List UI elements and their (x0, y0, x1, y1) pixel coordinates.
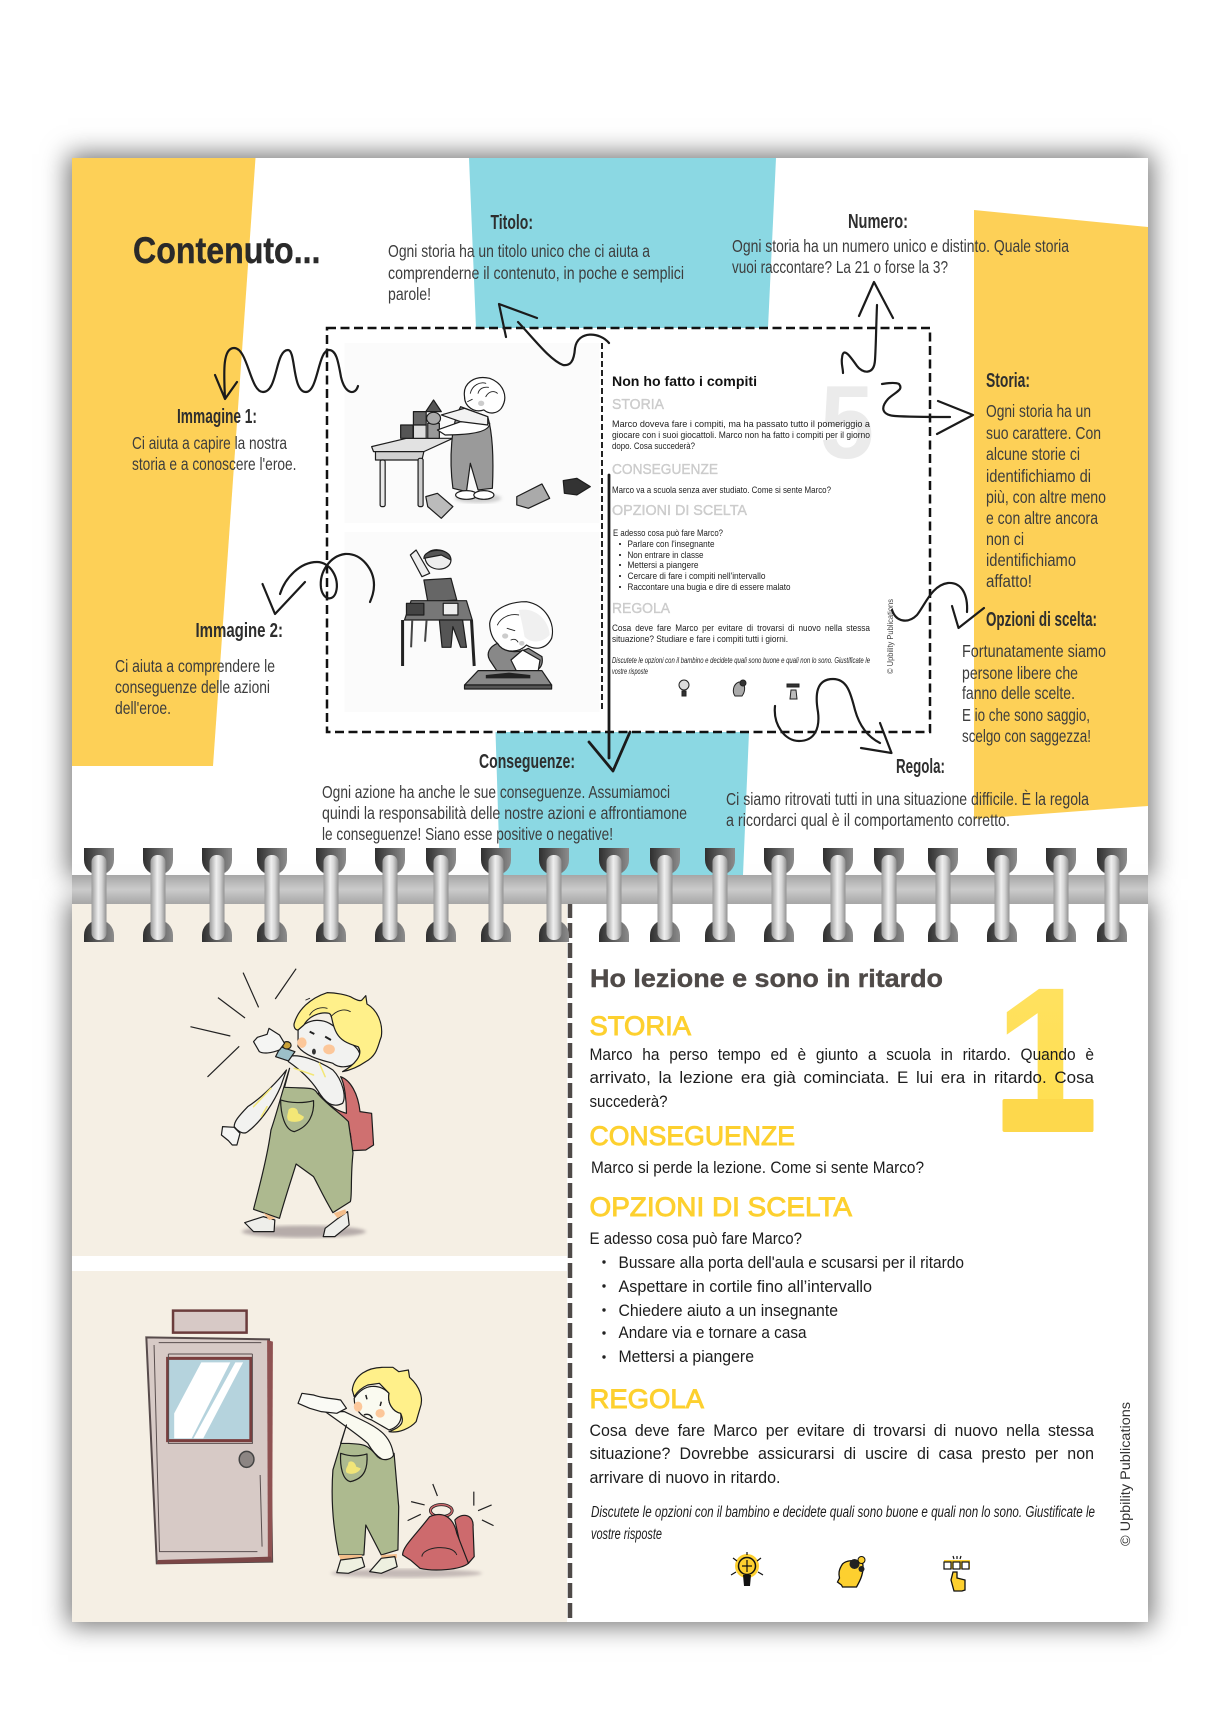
icon: light bulb (731, 1552, 763, 1586)
arrow: to Opzioni di scelta (892, 583, 984, 628)
mini options list: Raccontare una bugia e dire di essere malato (628, 582, 790, 593)
icon: head with gears (838, 1556, 865, 1587)
label: Storia: identifichiamo di (986, 466, 1091, 486)
label: Storia: Storia: (986, 370, 1030, 392)
mini heading: conseguenze: CONSEGUENZE (612, 461, 718, 478)
bottom page sheet (72, 904, 1148, 1622)
section: Regola (590, 1384, 1095, 1487)
mini page text (612, 365, 895, 699)
section: Opzioni di scelta: Mettersi a piangere (618, 1347, 754, 1366)
label: Opzioni di scelta: E io che sono saggio, (962, 705, 1090, 725)
mini options list: E adesso cosa può fare Marco? (613, 528, 723, 539)
section: Regola: Cosa deve fare Marco per evitare di trovarsi di nuovo nella stessa (590, 1421, 1095, 1440)
spiral binding band (72, 875, 1148, 904)
mini options list (613, 528, 790, 593)
label: Storia: non ci (986, 529, 1024, 549)
label: Numero: Ogni storia ha un numero unico e distinto. Quale storia (732, 236, 1069, 256)
mini heading: regola: REGOLA (612, 600, 670, 617)
mini heading: storia: STORIA (612, 396, 664, 413)
section: Conseguenze: Marco si perde la lezione. Come si sente Marco? (591, 1158, 924, 1177)
mini rule text: Discutete le opzioni con il bambino e decidete quali sono buone e quali non lo sono. Giustificate le (612, 655, 870, 665)
section: Storia (590, 1011, 1095, 1111)
label: Immagine 2: Immagine 2: (196, 620, 283, 642)
section: Storia: succederà? (590, 1092, 668, 1111)
arrow: to Titolo (499, 304, 609, 365)
section: Regola: arrivare di nuovo in ritardo. (590, 1468, 780, 1487)
mini illustration 1: child playing with blocks (372, 378, 590, 518)
label: Titolo: Titolo: (490, 212, 533, 234)
label: Titolo (388, 212, 684, 304)
label: Immagine 1 (132, 406, 296, 474)
label: Storia: e con altre ancora (986, 508, 1098, 528)
label: Immagine 1: Immagine 1: (177, 406, 257, 428)
illustration: door (146, 1311, 273, 1564)
label: Immagine 1: storia e a conoscere l'eroe. (132, 454, 296, 474)
label: Regola: Ci siamo ritrovati tutti in una situazione difficile. È la regola (726, 789, 1089, 809)
arrow: to Immagine 1 (215, 348, 358, 399)
mini icons (679, 680, 799, 699)
label: Conseguenze (322, 751, 687, 844)
mini rule text (612, 623, 871, 676)
mini illustration backgrounds (344, 343, 602, 712)
spiral binding rings (84, 848, 1127, 942)
section: Regola: situazione? Dovrebbe assicurarsi di uscire di casa presto per non (590, 1444, 1094, 1463)
heading: Contenuto: Contenuto... (133, 230, 320, 271)
label: Numero: vuoi raccontare? La 21 o forse la 3? (732, 257, 948, 277)
label: Storia (986, 370, 1106, 591)
label: Immagine 2: conseguenze delle azioni (115, 677, 270, 697)
mini number 5: 5 (820, 365, 874, 481)
mini options list: Parlare con l'insegnante (628, 539, 714, 550)
label: Storia: suo carattere. Con (986, 423, 1101, 443)
label: Titolo: parole! (388, 284, 431, 304)
label: Regola: a ricordarci qual è il comportamento corretto. (726, 810, 1010, 830)
mini page: dashed frame (327, 328, 930, 732)
label: Numero: Numero: (848, 211, 908, 233)
icon: hand choosing (944, 1556, 970, 1591)
mini heading: opzioni: OPZIONI DI SCELTA (612, 502, 747, 519)
label: Opzioni di scelta: fanno delle scelte. (962, 683, 1075, 703)
mini rule text: Cosa deve fare Marco per evitare di trovarsi di nuovo nella stessa (612, 623, 871, 634)
mini copyright: © Upbility Publications (885, 599, 895, 674)
label: Opzioni di scelta: persone libere che (962, 663, 1078, 683)
mini rule text: vostre risposte (612, 666, 648, 676)
discussion note: vostre risposte (591, 1526, 662, 1543)
mini options list: Cercare di fare i compiti nell'intervallo (628, 571, 766, 582)
section: Opzioni di scelta: Aspettare in cortile fino all’intervallo (618, 1277, 872, 1296)
label: Storia: identifichiamo (986, 550, 1076, 570)
arrow: to Numero (842, 282, 893, 373)
label: Opzioni di scelta: Fortunatamente siamo (962, 641, 1106, 661)
label: Conseguenze: Conseguenze: (479, 751, 575, 773)
section: Opzioni di scelta: Chiedere aiuto a un insegnante (618, 1301, 838, 1320)
section: Conseguenze (590, 1121, 924, 1177)
discussion note (591, 1504, 1095, 1543)
section: Opzioni di scelta: Andare via e tornare a casa (618, 1323, 807, 1342)
section: Opzioni di scelta: OPZIONI DI SCELTA (590, 1192, 852, 1222)
arrow: to Regola (775, 679, 892, 753)
dashed divider: bottom page (568, 903, 572, 1619)
label: Titolo: Ogni storia ha un titolo unico che ci aiuta a (388, 241, 650, 261)
label: Storia: più, con altre meno (986, 487, 1106, 507)
panel: bottom page left background (72, 904, 567, 1622)
label: Regola (726, 756, 1089, 830)
mini title: Non ho fatto i compiti (612, 373, 757, 389)
mini story text: giocare con i suoi giocattoli. Marco non ha fatto i compiti per il giorno (612, 430, 870, 441)
section: Storia: Marco ha perso tempo ed è giunto a scuola in ritardo. Quando è (590, 1045, 1094, 1064)
label: Opzioni di scelta: Opzioni di scelta: (986, 609, 1097, 631)
label: Regola: Regola: (896, 756, 945, 778)
label: Immagine 1: Ci aiuta a capire la nostra (132, 433, 287, 453)
mini options list: Mettersi a piangere (628, 560, 698, 571)
label: Conseguenze: le conseguenze! Siano esse positive o negative! (322, 824, 613, 844)
section: Opzioni di scelta: E adesso cosa può fare Marco? (590, 1229, 802, 1248)
background colour shapes: top page (72, 158, 1148, 875)
card title: Ho lezione e sono in ritardo (590, 965, 943, 993)
label: Conseguenze: Ogni azione ha anche le sue conseguenze. Assumiamoci (322, 782, 670, 802)
label: Opzioni di scelta: scelgo con saggezza! (962, 726, 1091, 746)
label: Immagine 2: dell'eroe. (115, 698, 171, 718)
section: Opzioni di scelta (590, 1192, 964, 1366)
label: Immagine 2: Ci aiuta a comprendere le (115, 656, 275, 676)
mini story text: Marco doveva fare i compiti, ma ha passato tutto il pomeriggio a (612, 419, 871, 430)
section: Storia: STORIA (590, 1011, 691, 1041)
label: Storia: alcune storie ci (986, 444, 1080, 464)
arrow: to Storia (882, 383, 973, 434)
illustration: boy at door with backpack (298, 1367, 494, 1578)
top page sheet (72, 158, 1148, 875)
label: Titolo: comprenderne il contenuto, in poche e semplici (388, 263, 684, 283)
mini options list: Non entrare in classe (628, 550, 704, 561)
mini rule text: situazione? Studiare e fare i compiti tutti i giorni. (612, 634, 788, 645)
label: Conseguenze: quindi la responsabilità delle nostre azioni e affrontiamone (322, 803, 687, 823)
arrow: to Conseguenze (589, 475, 630, 771)
section: Opzioni di scelta: Bussare alla porta dell'aula e scusarsi per il ritardo (618, 1253, 964, 1272)
mini story text: dopo. Cosa succederà? (612, 441, 695, 452)
illustration: boy looking at watch (190, 969, 382, 1238)
section: Storia: arrivato, la lezione era già cominciata. E lui era in ritardo. Cosa (590, 1068, 1095, 1087)
label: Numero (732, 211, 1069, 277)
arrow: to Immagine 2 (262, 554, 374, 614)
label: Storia: affatto! (986, 571, 1032, 591)
label: Storia: Ogni storia ha un (986, 401, 1091, 421)
mini illustration 2: children at desks (403, 550, 552, 689)
big watercolor number 1: 1 (994, 945, 1098, 1177)
label: Opzioni di scelta (962, 609, 1106, 746)
mini story text (612, 419, 871, 452)
section: Conseguenze: CONSEGUENZE (590, 1121, 795, 1151)
mini consequences text: Marco va a scuola senza aver studiato. Come si sente Marco? (612, 485, 831, 496)
section: Regola: REGOLA (590, 1384, 704, 1414)
label: Immagine 2 (115, 620, 283, 718)
copyright: © Upbility Publications (1118, 1402, 1133, 1546)
